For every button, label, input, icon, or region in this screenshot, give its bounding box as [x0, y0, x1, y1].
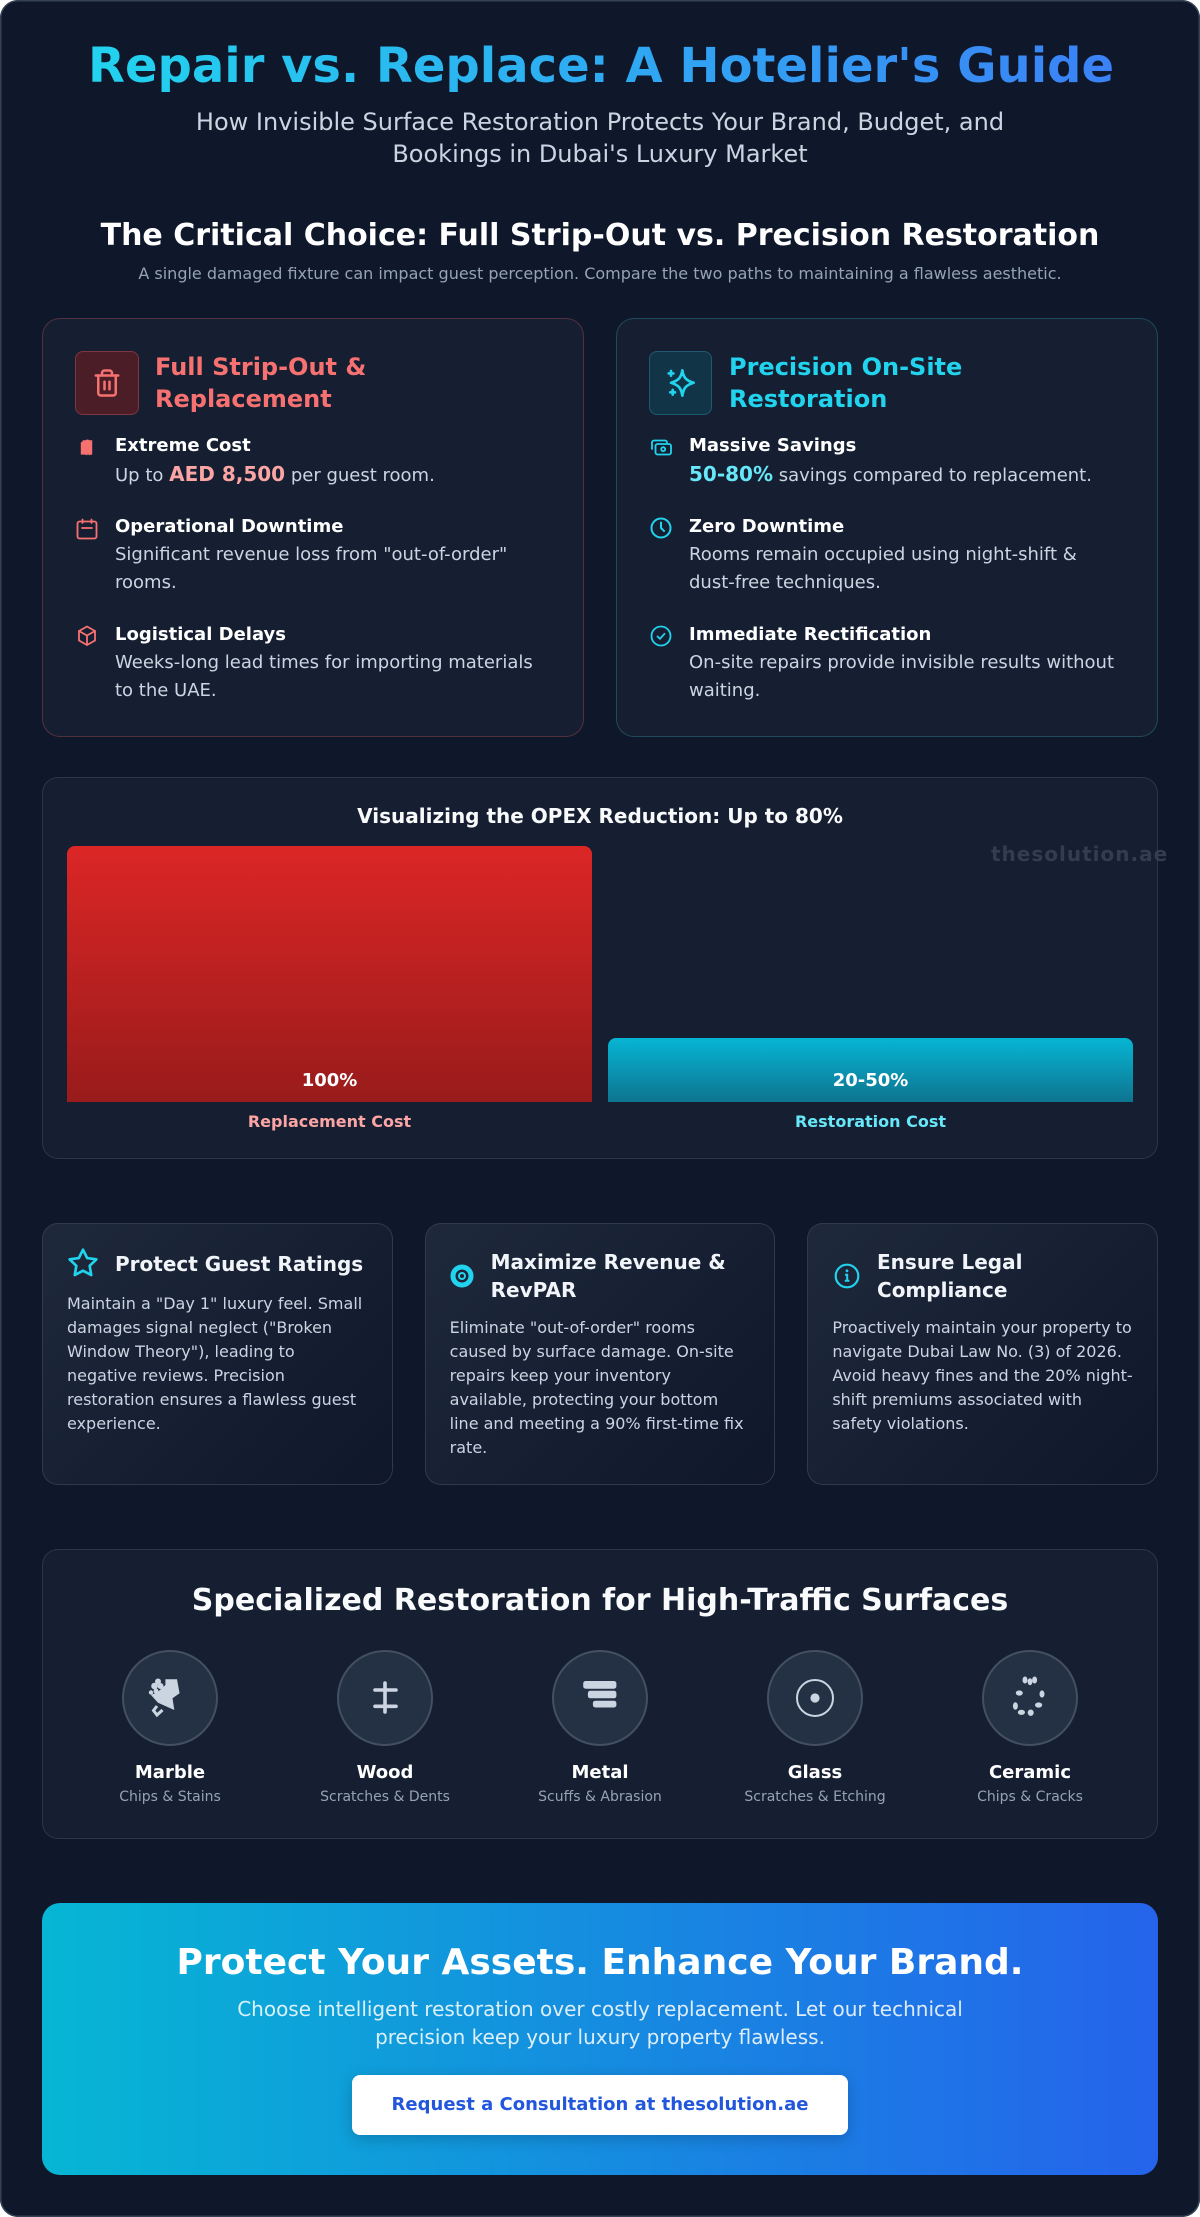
heading: Protect Guest Ratings: [115, 1252, 363, 1276]
body text: caused by surface damage. On-site: [450, 1342, 734, 1361]
item: operational downtime: [76, 516, 507, 593]
subtitle: [196, 108, 1004, 168]
title: Repair vs. Replace: A Hotelier's Guide: [88, 38, 1114, 94]
section intro text: A single damaged fixture can impact guest perception. Compare the two paths to maintaining a flawless aesthetic.: [138, 264, 1062, 283]
text: immediate rectification: waiting.: [689, 680, 760, 701]
subtitle: Bookings in Dubai's Luxury Market: [392, 140, 808, 168]
body text: line and meeting a 90% first-time fix: [450, 1414, 744, 1433]
damage types: Chips & Cracks: [977, 1789, 1083, 1805]
text: operational downtime: Significant revenue loss from "out-of-order": [115, 544, 507, 565]
body text: Eliminate "out-of-order" rooms: [450, 1318, 695, 1337]
surface: marble: [119, 1650, 221, 1805]
heading: precision on-site restoration: Precision On-Site: [729, 353, 962, 381]
item: massive savings: [651, 435, 1092, 486]
text: massive savings: [689, 435, 1092, 486]
panel: OPEX reduction chart: [42, 777, 1158, 1159]
icon: star: [68, 1248, 98, 1276]
icon: cost: [80, 440, 92, 456]
name: Metal: [571, 1762, 629, 1783]
body text: [67, 1294, 362, 1433]
text: extreme cost: [115, 435, 435, 486]
item: immediate rectification: [650, 624, 1114, 701]
text: zero downtime: Rooms remain occupied using night-shift &: [689, 544, 1077, 565]
damage types: Scratches & Etching: [744, 1789, 886, 1805]
panel: call to action: [42, 1903, 1158, 2175]
body text: safety violations.: [832, 1414, 969, 1433]
icon: trash can: [75, 351, 139, 415]
body text: shift premiums associated with: [832, 1390, 1082, 1409]
heading: [877, 1250, 1022, 1302]
name: Glass: [788, 1762, 842, 1783]
section heading: the critical choice: The Critical Choice: Full Strip-Out vs. Precision Restoration: [101, 218, 1099, 253]
bar value: 100%: [302, 1070, 357, 1091]
text: extreme cost: Up to AED 8,500 per guest room.: [115, 462, 435, 486]
heading: Compliance: [877, 1278, 1007, 1302]
bar value: 20-50%: [833, 1070, 908, 1091]
text: massive savings: Massive Savings: [689, 435, 856, 456]
icon: target: [450, 1264, 474, 1288]
item: zero downtime: [650, 516, 1077, 593]
heading: RevPAR: [491, 1278, 576, 1302]
text: logistical delays: Weeks-long lead times for importing materials: [115, 652, 533, 673]
watermark: thesolution.ae: [991, 842, 1168, 866]
heading: full strip-out and replacement: Full Strip-Out &: [155, 353, 366, 381]
text: operational downtime: [115, 516, 507, 593]
bar: restoration cost 20-50%: [608, 1038, 1133, 1102]
icon: check circle: [650, 626, 672, 646]
heading: precision on-site restoration: [729, 353, 962, 413]
heading: [491, 1250, 726, 1302]
item: extreme cost: [80, 435, 435, 486]
text: zero downtime: Zero Downtime: [689, 516, 844, 537]
icon: box: [78, 626, 96, 646]
surface: wood: [320, 1650, 450, 1805]
icon: wood: [337, 1650, 433, 1746]
cta button: Request a Consultation at thesolution.ae: [392, 2094, 808, 2115]
icon: marble: [122, 1650, 218, 1746]
subtitle: How Invisible Surface Restoration Protects Your Brand, Budget, and: [196, 108, 1004, 136]
name: Marble: [135, 1762, 205, 1783]
body text: navigate Dubai Law No. (3) of 2026.: [832, 1342, 1122, 1361]
text: operational downtime: Operational Downtime: [115, 516, 343, 537]
heading: full strip-out and replacement: Replacement: [155, 385, 332, 413]
surface: ceramic: [977, 1650, 1083, 1805]
body text: [450, 1318, 744, 1457]
bar label: replacement cost: Replacement Cost: [248, 1112, 411, 1131]
panel: specialized restoration surfaces: [42, 1549, 1158, 1839]
bar: replacement cost 100%: [67, 846, 592, 1102]
cta text: [237, 1997, 963, 2049]
text: immediate rectification: On-site repairs provide invisible results without: [689, 652, 1114, 673]
body text: Avoid heavy fines and the 20% night-: [832, 1366, 1133, 1385]
body text: Window Theory"), leading to: [67, 1342, 295, 1361]
heading: Maximize Revenue &: [491, 1250, 726, 1274]
panel: precision on-site restoration: [616, 318, 1158, 737]
panel: maximize revenue and RevPAR: [425, 1223, 775, 1485]
body text: rate.: [450, 1438, 487, 1457]
panel: protect guest ratings: [42, 1223, 393, 1485]
icon: banknotes: [651, 440, 672, 456]
body text: Proactively maintain your property to: [832, 1318, 1132, 1337]
bar label: restoration cost: Restoration Cost: [795, 1112, 946, 1131]
text: operational downtime: rooms.: [115, 572, 177, 593]
body text: available, protecting your bottom: [450, 1390, 718, 1409]
text: zero downtime: [689, 516, 1077, 593]
icon: calendar: [76, 518, 98, 540]
cta text: precision keep your luxury property flawless.: [375, 2025, 825, 2049]
damage types: Chips & Stains: [119, 1789, 221, 1805]
text: immediate rectification: Immediate Rectification: [689, 624, 931, 645]
surface: glass: [744, 1650, 886, 1805]
text: logistical delays: to the UAE.: [115, 680, 217, 701]
heading: Specialized Restoration for High-Traffic Surfaces: [192, 1583, 1008, 1618]
text: immediate rectification: [689, 624, 1114, 701]
text: massive savings: 50-80% savings compared to replacement.: [689, 462, 1092, 486]
icon: clock: [650, 518, 672, 538]
body text: negative reviews. Precision: [67, 1366, 285, 1385]
damage types: Scuffs & Abrasion: [538, 1789, 662, 1805]
text: zero downtime: dust-free techniques.: [689, 572, 881, 593]
panel: full strip-out and replacement: [42, 318, 584, 737]
icon: sparkles: [649, 351, 712, 415]
cta button: [352, 2075, 848, 2135]
panel: ensure legal compliance: [807, 1223, 1158, 1485]
body text: repairs keep your inventory: [450, 1366, 671, 1385]
cta heading: Protect Your Assets. Enhance Your Brand.: [176, 1942, 1024, 1983]
icon: info: [834, 1264, 860, 1288]
text: extreme cost: Extreme Cost: [115, 435, 251, 456]
body text: damages signal neglect ("Broken: [67, 1318, 332, 1337]
icon: glass: [767, 1650, 863, 1746]
body text: Maintain a "Day 1" luxury feel. Small: [67, 1294, 362, 1313]
body text: [832, 1318, 1133, 1433]
icon: metal: [552, 1650, 648, 1746]
cta text: Choose intelligent restoration over costly replacement. Let our technical: [237, 1997, 963, 2021]
heading: Ensure Legal: [877, 1250, 1022, 1274]
surface: metal: [538, 1650, 662, 1805]
text: logistical delays: Logistical Delays: [115, 624, 286, 645]
heading: full strip-out and replacement: [155, 353, 366, 413]
name: Wood: [357, 1762, 413, 1783]
text: logistical delays: [115, 624, 533, 701]
name: Ceramic: [989, 1762, 1071, 1783]
heading: precision on-site restoration: Restoration: [729, 385, 887, 413]
icon: ceramic: [982, 1650, 1078, 1746]
item: logistical delays: [78, 624, 533, 701]
body text: restoration ensures a flawless guest: [67, 1390, 356, 1409]
damage types: Scratches & Dents: [320, 1789, 450, 1805]
body text: experience.: [67, 1414, 161, 1433]
chart title: Visualizing the OPEX Reduction: Up to 80%: [357, 804, 843, 828]
